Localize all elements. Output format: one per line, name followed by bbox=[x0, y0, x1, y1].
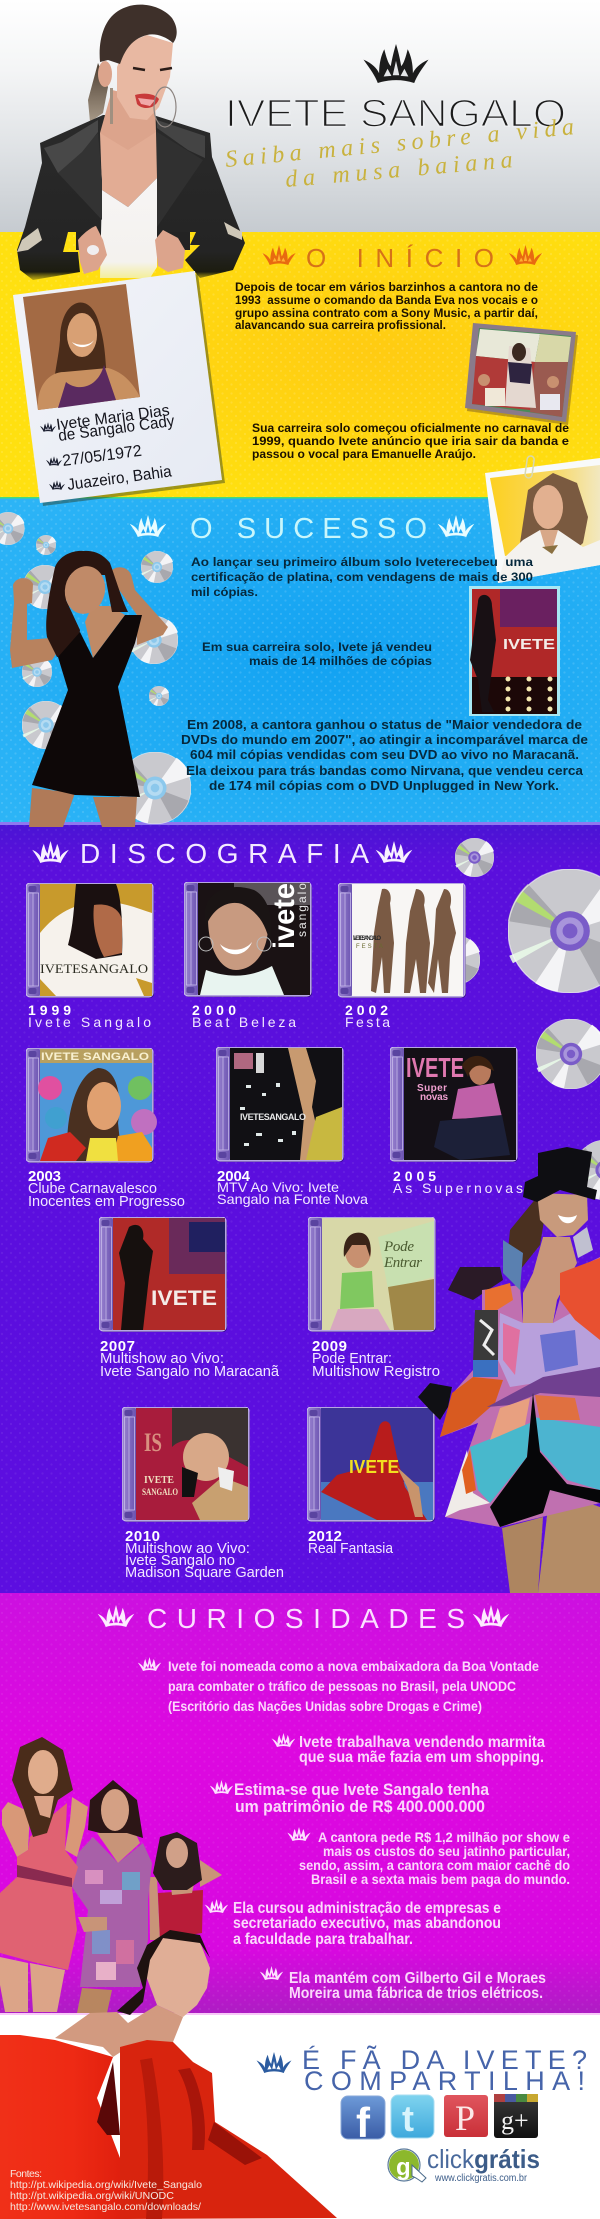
heading: Curiosidades bbox=[98, 1603, 509, 1634]
icon: crown bullet bbox=[287, 1827, 311, 1841]
panel: header background bbox=[0, 0, 600, 232]
icon: paperclip bbox=[525, 456, 535, 478]
fact: cachê: mais os custos do seu jatinho particular, bbox=[323, 1843, 570, 1859]
panel: Discografia background bbox=[0, 825, 600, 1593]
fact: trios elétricos: Ela mantém com Gilberto Gil e Moraes bbox=[289, 1970, 546, 1987]
album label: 2010: Madison Square Garden bbox=[125, 1564, 284, 1581]
icon: crown left bbox=[32, 841, 69, 863]
image: Banda Eva CD bbox=[465, 323, 578, 425]
icon: Pinterest: P bbox=[455, 2098, 475, 2138]
text: sources: http://www.ivetesangalo.com/downloads/ bbox=[10, 2201, 201, 2213]
icon: small crown date bbox=[46, 456, 62, 466]
album: 2005 Supernovas: IVETE bbox=[406, 1052, 464, 1083]
album label: 2012: 2012 bbox=[308, 1528, 342, 1545]
figure: Ivete in top hat and colourful coat bbox=[418, 1147, 600, 1593]
album label: 2010: Multishow ao Vivo: bbox=[125, 1540, 250, 1557]
album: 2005 Supernovas: Super bbox=[417, 1083, 447, 1094]
fact: patrimônio: um patrimônio de R$ 400.000.000 bbox=[235, 1797, 485, 1816]
album label: 2003: Clube Carnavalesco bbox=[28, 1180, 157, 1197]
fact: cachê: Brasil e a sexta mais bem paga do mundo. bbox=[311, 1871, 570, 1887]
text: Sucesso long paragraph: 604 mil cópias vendidas com seu DVD ao vivo no Maracanã. bbox=[190, 747, 579, 762]
album label: 1999 bbox=[28, 1002, 151, 1030]
card: ID photo with birth data bbox=[13, 271, 225, 506]
album label: 2003: Inocentes em Progresso bbox=[28, 1193, 185, 1210]
heading: share call to action: COMPARTILHA! bbox=[304, 2066, 585, 2096]
album label: 2005: As Supernovas bbox=[393, 1180, 523, 1196]
album label: 2000: Beat Beleza bbox=[192, 1014, 296, 1030]
panel: O Início background bbox=[0, 232, 600, 497]
heading text: O INÍCIO bbox=[306, 243, 494, 273]
album label: 2003 bbox=[28, 1168, 185, 1210]
album: 2002 Festa: IVETE SANGALO bbox=[353, 936, 381, 942]
album label: 1999: 1999 bbox=[28, 1002, 71, 1018]
subtitle: da musa baiana bbox=[284, 147, 514, 193]
icon: crown left bbox=[262, 245, 296, 265]
album: 1999 Ivete Sangalo bbox=[26, 883, 154, 998]
figure: Ivete in leather jacket bbox=[17, 5, 245, 280]
title: IVETE SANGALO bbox=[225, 92, 566, 136]
album label: 1999: Ivete Sangalo bbox=[28, 1014, 151, 1030]
fact: trios elétricos bbox=[260, 1966, 546, 2002]
album label: 2005 bbox=[393, 1168, 523, 1196]
fact: marmita: que sua mãe fazia em um shopping. bbox=[299, 1749, 544, 1766]
text: Sucesso long paragraph bbox=[181, 717, 588, 793]
text: Início paragraph one: grupo assina contrato com a Sony Music, a partir daí, bbox=[235, 308, 538, 320]
figure: three Ivetes in dresses bbox=[0, 1737, 222, 2013]
text: sources: http://pt.wikipedia.org/wiki/UNODC bbox=[10, 2190, 174, 2202]
text: Início paragraph two: 1999, quando Ivete anúncio que iria sair da banda e bbox=[252, 436, 569, 448]
album: 2007 Maracanã bbox=[99, 1217, 227, 1332]
album label: 2005: 2005 bbox=[393, 1168, 436, 1184]
text: Sucesso first paragraph: mil cópias. bbox=[191, 585, 258, 599]
album: 2005 Supernovas: novas bbox=[420, 1092, 448, 1103]
icon: crown left bbox=[98, 1605, 134, 1627]
subtitle: Saiba mais sobre a vida bbox=[224, 114, 575, 173]
album label: 2009: Pode Entrar: bbox=[312, 1350, 392, 1367]
logo: clickgrátis bbox=[388, 2144, 540, 2184]
logo wordmark: clickgrátis bbox=[427, 2144, 540, 2174]
text: 14 milhões de cópias: Em sua carreira solo, Ivete já vendeu bbox=[202, 640, 432, 654]
album: 2010 Madison Square Garden bbox=[122, 1407, 250, 1522]
text: Sucesso long paragraph: de 174 mil cópias com o DVD Unplugged in New York. bbox=[209, 778, 559, 793]
icon: crown left bbox=[130, 515, 166, 537]
icon: crown bullet bbox=[260, 1966, 283, 1980]
text: birth date: 27/05/1972 bbox=[61, 443, 143, 470]
icon: crown right bbox=[509, 245, 542, 265]
icon: Google Plus bbox=[494, 2094, 538, 2138]
fact: trios elétricos: Moreira uma fábrica de trios elétricos. bbox=[289, 1985, 543, 2002]
fact: administração: secretariado executivo, mas abandonou bbox=[233, 1915, 501, 1932]
icon: crown right bbox=[438, 515, 474, 537]
album label: 2004: MTV Ao Vivo: Ivete bbox=[217, 1179, 339, 1195]
text: full name: de Sangalo Cady bbox=[57, 413, 176, 445]
album label: 2004: 2004 bbox=[217, 1168, 251, 1185]
album label: 2007: Ivete Sangalo no Maracanã bbox=[100, 1363, 280, 1380]
fact: patrimônio: Estima-se que Ivete Sangalo tenha bbox=[234, 1780, 489, 1799]
album label: 2007: 2007 bbox=[100, 1338, 135, 1355]
icon: blue crown bbox=[256, 2052, 292, 2073]
album: 2007 Maracanã: IVETE bbox=[151, 1287, 217, 1310]
icon: crown bullet bbox=[205, 1899, 228, 1913]
fact: cachê: A cantora pede R$ 1,2 milhão por show e bbox=[318, 1829, 570, 1845]
fact: marmita bbox=[272, 1733, 545, 1766]
text: Sucesso first paragraph: certificação de platina, com vendagens de mais de 300 bbox=[191, 570, 533, 584]
album label: 2009: Multishow Registro bbox=[312, 1363, 440, 1380]
icon: Facebook: f bbox=[356, 2099, 371, 2146]
fact: marmita: Ivete trabalhava vendendo marmita bbox=[299, 1734, 545, 1751]
icon: crown bullet bbox=[210, 1780, 233, 1794]
album: 2002 Festa bbox=[338, 883, 466, 998]
text: sources bbox=[10, 2168, 202, 2213]
fact: patrimônio bbox=[210, 1780, 489, 1816]
fact: goodwill ambassador: para combater o tráfico de pessoas no Brasil, pela UNODC bbox=[168, 1679, 516, 1694]
album label: 2004 bbox=[217, 1168, 368, 1207]
album: 2000 Beat Beleza: sangalo bbox=[295, 883, 309, 937]
icon: small crown name bbox=[40, 422, 56, 432]
figure: Ivete in red dress bbox=[0, 1930, 337, 2219]
album: 2004 MTV Ao Vivo bbox=[216, 1047, 344, 1162]
album: 2009 Pode Entrar: Entrar bbox=[383, 1255, 422, 1271]
album: 2010 Madison Square Garden: IS bbox=[144, 1428, 162, 1457]
text: Início paragraph two bbox=[252, 423, 569, 461]
heading: O Início bbox=[262, 243, 542, 273]
album label: 2010: 2010 bbox=[125, 1528, 160, 1545]
album: 2004 MTV Ao Vivo: IVETESANGALO bbox=[240, 1112, 306, 1122]
image: DVD Maracanã cover: IVETE bbox=[503, 636, 555, 653]
text: 14 milhões de cópias bbox=[202, 640, 432, 668]
icon: crown right bbox=[376, 841, 412, 863]
album label: 2010: Ivete Sangalo no bbox=[125, 1552, 235, 1569]
heading text: CURIOSIDADES bbox=[147, 1603, 465, 1634]
album: 2012 Real Fantasia: IVETE bbox=[349, 1457, 399, 1477]
heading: share call to action: É FÃ DA IVETE? bbox=[302, 2044, 587, 2075]
album: 2003 Clube Carnavalesco: IVETE SANGALO bbox=[41, 1051, 150, 1063]
text: sources: Fontes: bbox=[10, 2168, 42, 2180]
image: clipped photo of Ivete bbox=[485, 456, 600, 583]
icon: Twitter bbox=[391, 2095, 434, 2139]
fact: administração: Ela cursou administração de empresas e bbox=[233, 1900, 501, 1917]
heading: share call to action bbox=[302, 2044, 587, 2096]
icon: Pinterest bbox=[444, 2095, 488, 2138]
text: 14 milhões de cópias: mais de 14 milhões de cópias bbox=[249, 654, 432, 668]
text: sources: http://pt.wikipedia.org/wiki/Ivete_Sangalo bbox=[10, 2179, 202, 2191]
album label: 2009: 2009 bbox=[312, 1338, 347, 1355]
text: Início paragraph one: alavancando sua carreira profissional. bbox=[235, 320, 446, 332]
album: 2012 Real Fantasia bbox=[307, 1407, 435, 1522]
text: Sucesso first paragraph bbox=[191, 555, 533, 599]
icon: g cursor mark: g bbox=[396, 2154, 411, 2181]
fact: cachê: sendo, assim, a cantora com maior cachê do bbox=[299, 1857, 570, 1873]
album label: 2002: 2002 bbox=[345, 1002, 388, 1018]
text: Sucesso long paragraph: Em 2008, a cantora ganhou o status de "Maior vendedora de bbox=[187, 717, 582, 732]
album label: 2000: 2000 bbox=[192, 1002, 236, 1018]
album: 1999 Ivete Sangalo: IVETESANGALO bbox=[40, 961, 148, 976]
heading text: O SUCESSO bbox=[190, 513, 427, 545]
album: 2002 Festa: FESTA bbox=[356, 944, 385, 950]
album: 2010 Madison Square Garden: IVETE bbox=[144, 1474, 174, 1486]
figure: Ivete in black dress bbox=[10, 551, 168, 827]
album label: 2012 bbox=[308, 1528, 394, 1557]
album: 2000 Beat Beleza bbox=[184, 882, 312, 997]
text: birthplace: Juazeiro, Bahia bbox=[66, 463, 173, 494]
image: young Ivete portrait bbox=[23, 284, 140, 410]
text: Início paragraph two: Sua carreira solo começou oficialmente no carnaval de bbox=[252, 423, 569, 435]
panel: O Sucesso background bbox=[0, 497, 600, 825]
fact: goodwill ambassador: Ivete foi nomeada como a nova embaixadora da Boa Vontade bbox=[168, 1659, 539, 1674]
album label: 2007: Multishow ao Vivo: bbox=[100, 1350, 224, 1367]
album label: 2004: Sangalo na Fonte Nova bbox=[217, 1191, 368, 1207]
decorative CDs: Discografia bbox=[430, 838, 600, 1200]
icon: title crown bbox=[364, 44, 428, 83]
album label: 2010 bbox=[125, 1528, 284, 1581]
icon: small crown place bbox=[49, 480, 65, 490]
fact: goodwill ambassador bbox=[138, 1657, 539, 1714]
album label: 2002: Festa bbox=[345, 1014, 390, 1030]
album: 2009 Pode Entrar bbox=[308, 1217, 436, 1332]
panel: Curiosidades background bbox=[0, 1593, 600, 2013]
decorative CDs: Sucesso bbox=[0, 512, 191, 824]
fact: cachê bbox=[287, 1827, 570, 1887]
album: 2005 Supernovas bbox=[390, 1047, 518, 1162]
icon: Google Plus: g+ bbox=[501, 2106, 529, 2135]
text: Sucesso first paragraph: Ao lançar seu primeiro álbum solo Iveterecebeu uma bbox=[191, 555, 533, 569]
logo url: www.clickgratis.com.br bbox=[434, 2173, 528, 2184]
text: Sucesso long paragraph: Ela deixou para trás bandas como Nirvana, que vendeu cerca bbox=[186, 763, 584, 778]
album: 2009 Pode Entrar: Pode bbox=[383, 1239, 414, 1255]
album label: 2002 bbox=[345, 1002, 390, 1030]
album label: 2012: Real Fantasia bbox=[308, 1540, 394, 1557]
icon: Twitter: t bbox=[402, 2098, 414, 2139]
fact: administração: a faculdade para trabalhar. bbox=[233, 1931, 413, 1948]
icon: crown bullet bbox=[272, 1733, 295, 1747]
album: 2003 Clube Carnavalesco bbox=[26, 1048, 157, 1163]
text: full name: Ivete Maria Dias bbox=[55, 402, 171, 434]
album label: 2009 bbox=[312, 1338, 440, 1380]
icon: crown bullet bbox=[138, 1657, 161, 1671]
album: 2010 Madison Square Garden: SANGALO bbox=[142, 1487, 178, 1497]
text: Início paragraph one: 1993 assume o comando da Banda Eva nos vocais e o bbox=[235, 295, 538, 307]
album label: 2003: 2003 bbox=[28, 1168, 61, 1185]
icon: g cursor mark bbox=[388, 2149, 426, 2182]
album label: 2000 bbox=[192, 1002, 296, 1030]
heading: O Sucesso bbox=[130, 513, 474, 545]
panel: share footer background bbox=[0, 2013, 600, 2219]
album label: 2007 bbox=[100, 1338, 280, 1380]
text: Sucesso long paragraph: DVDs do mundo em 2007", ao atingir a incomparável marca de bbox=[181, 732, 588, 747]
image: DVD Maracanã cover bbox=[469, 586, 560, 716]
fact: goodwill ambassador: (Escritório das Nações Unidas sobre Drogas e Crime) bbox=[168, 1699, 482, 1714]
fact: administração bbox=[205, 1899, 501, 1948]
text: Início paragraph one bbox=[235, 282, 538, 332]
text: Início paragraph one: Depois de tocar em vários barzinhos a cantora no de bbox=[235, 282, 538, 294]
text: Início paragraph two: passou o vocal para Emanuelle Araújo. bbox=[252, 449, 476, 461]
album: 2000 Beat Beleza: ivete bbox=[268, 883, 301, 949]
heading: Discografia bbox=[32, 838, 412, 869]
icon: crown right bbox=[473, 1605, 509, 1627]
icon: Facebook bbox=[341, 2096, 385, 2146]
heading text: DISCOGRAFIA bbox=[80, 838, 369, 869]
